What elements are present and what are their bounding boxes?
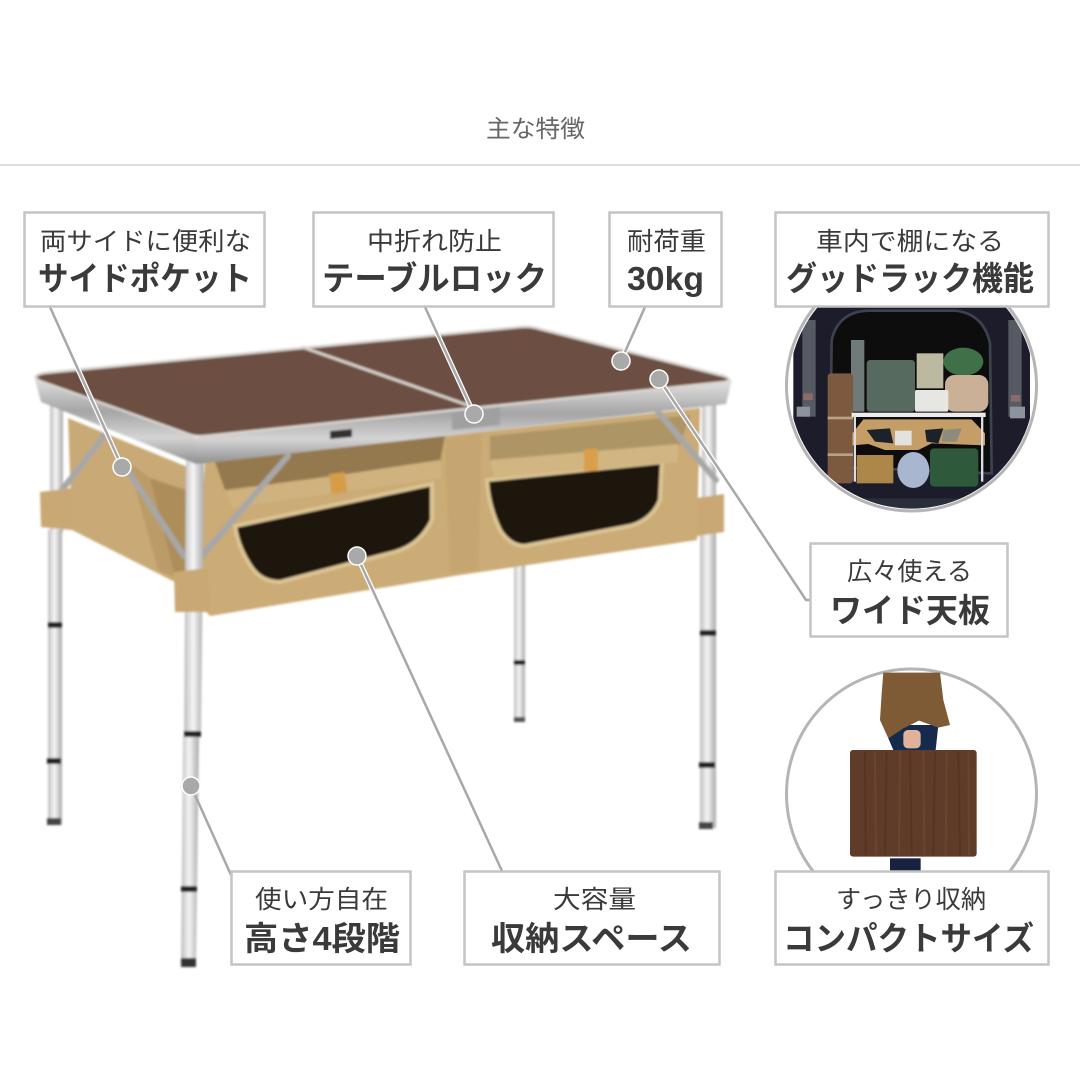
callout: car rack: 車内で棚になる [816,228,1004,256]
front left leg [181,450,204,967]
callout: wide top: ワイド天板 [830,592,990,629]
callout: adjustable height [232,872,410,964]
callout: table lock: テーブルロック [322,260,547,297]
callout: storage space: 大容量 [553,886,636,914]
circle photo: person carrying folded table [786,669,1036,919]
rolled flaps [226,444,678,508]
title: 主な特徴 [486,116,585,143]
callout: load capacity: 30kg [627,260,704,297]
back left leg [47,402,63,825]
right opening [487,462,662,546]
leader: wide top [650,370,810,600]
callout: wide top [810,544,1008,636]
callout: adjustable height: 使い方自在 [255,886,388,914]
back right leg [514,565,525,722]
circle photo: car rack [785,308,1038,512]
leader: adjustable height [182,777,231,875]
callout: side pocket: 両サイドに便利な [40,228,251,256]
leader: load capacity [612,307,645,370]
storage bag: side pocket [68,418,192,590]
infographic: table features [0,116,1080,969]
front right leg [699,402,716,829]
callout: car rack [776,212,1048,306]
callout: adjustable height: 高さ4段階 [244,920,400,957]
callout: load capacity [610,212,722,306]
callout: compact size [776,872,1048,964]
leader: side pocket [50,307,131,476]
callout: load capacity: 耐荷重 [627,228,706,256]
table top [36,327,729,436]
callout: storage space: 収納スペース [491,920,692,957]
left opening [235,484,432,582]
storage bag: front [196,408,700,616]
callout: storage space [464,872,720,964]
table frame [34,376,732,464]
cross braces [62,412,716,558]
callout: table lock: 中折れ防止 [367,228,502,256]
leader: table lock [425,307,483,423]
callout: side pocket [24,212,264,306]
callout: table lock [314,212,554,306]
callout: wide top: 広々使える [847,558,972,586]
fabric leg straps [40,488,724,612]
callout: compact size: すっきり収納 [836,886,986,914]
leader: storage space [348,547,502,871]
product photo: folding table with storage [34,327,732,967]
callout: side pocket: サイドポケット [38,260,252,297]
callout: compact size: コンパクトサイズ [783,920,1034,957]
callout: car rack: グッドラック機能 [786,260,1034,297]
